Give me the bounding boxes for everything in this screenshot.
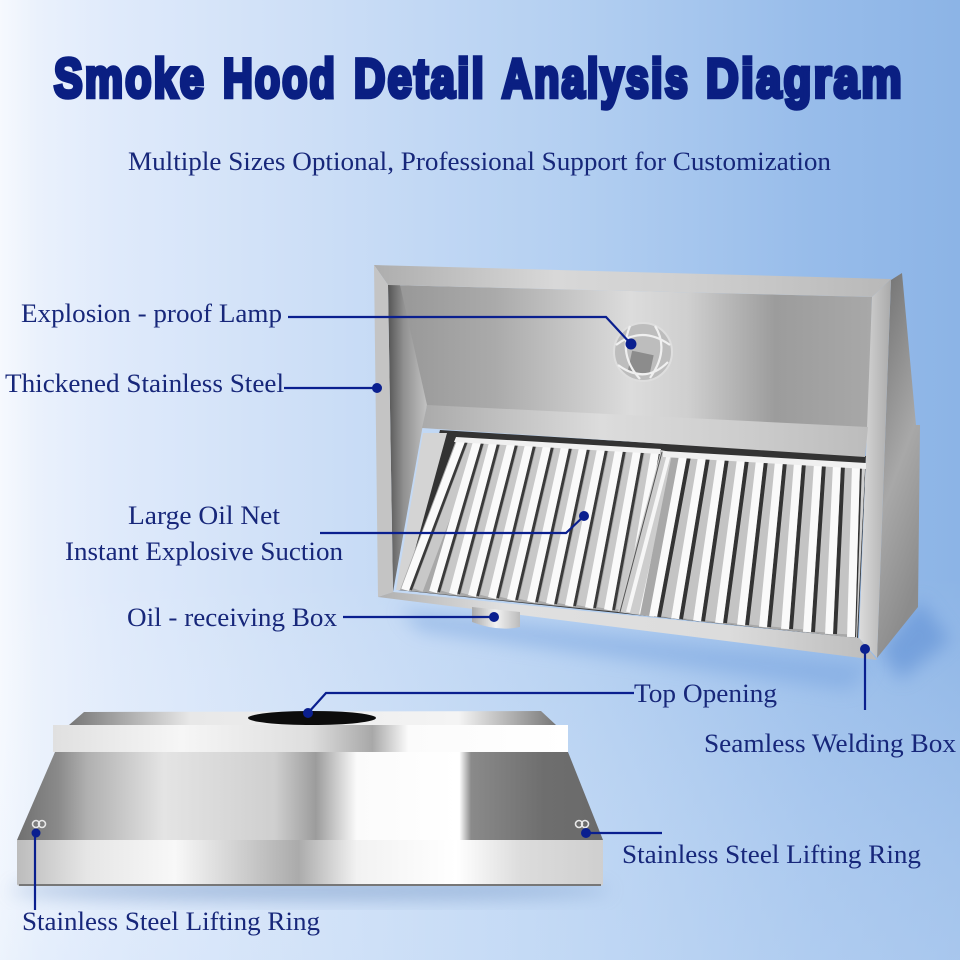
collar (53, 725, 568, 752)
callout: explosion-proof lamp (21, 299, 636, 350)
lower hood illustration (10, 711, 610, 900)
callout: seamless welding box (704, 644, 956, 758)
upper hood illustration (374, 265, 950, 690)
callout: large oil net (65, 501, 589, 566)
callout: right lifting ring: Stainless Steel Lifting Ring (622, 840, 921, 869)
left oil net (400, 442, 659, 612)
base bottom edge (19, 884, 601, 886)
callout: seamless welding box: Seamless Welding Box (704, 729, 956, 758)
callout: left lifting ring: Stainless Steel Lifting Ring (22, 907, 320, 936)
frame top (374, 265, 891, 297)
title: Analysis (502, 47, 690, 109)
net divider (618, 450, 684, 617)
right oil net (640, 458, 865, 638)
lower shadow behind filters (398, 430, 866, 638)
hood side panel (877, 273, 920, 658)
callout: large oil net: Instant Explosive Suction (65, 537, 343, 566)
left lifting ring (32, 820, 46, 828)
frame left (374, 265, 393, 597)
callout: left lifting ring (22, 828, 320, 936)
left net top rail (454, 437, 661, 454)
title: Diagram (706, 47, 904, 109)
hood back panel (388, 285, 872, 430)
callout: explosion-proof lamp: Explosion - proof Lamp (21, 299, 282, 328)
callout: large oil net: Large Oil Net (128, 501, 281, 530)
title: Smoke (54, 47, 206, 109)
title: Detail (354, 47, 486, 109)
callout: thickened stainless steel: Thickened Stainless Steel (5, 369, 284, 398)
title (54, 47, 904, 109)
top plate (69, 711, 556, 725)
explosion-proof lamp (614, 323, 672, 381)
top opening (248, 711, 376, 725)
right lifting ring (576, 820, 588, 828)
tapered body (17, 752, 603, 840)
subtitle: Multiple Sizes Optional, Professional Support for Customization (128, 147, 831, 176)
callout: right lifting ring (581, 828, 921, 869)
shelf (422, 405, 868, 457)
inner lower wall (396, 433, 447, 590)
callout: top opening: Top Opening (634, 679, 777, 708)
callout: top opening (303, 679, 777, 718)
base band (17, 840, 603, 886)
callout: oil receiving box: Oil - receiving Box (127, 603, 337, 632)
bottom frame (378, 592, 877, 660)
title: Hood (223, 47, 337, 109)
right net top rail (663, 451, 866, 469)
callout: oil receiving box (127, 603, 499, 632)
frame right (859, 279, 891, 658)
oil receiving box (472, 607, 520, 629)
inner left wall (388, 285, 427, 592)
